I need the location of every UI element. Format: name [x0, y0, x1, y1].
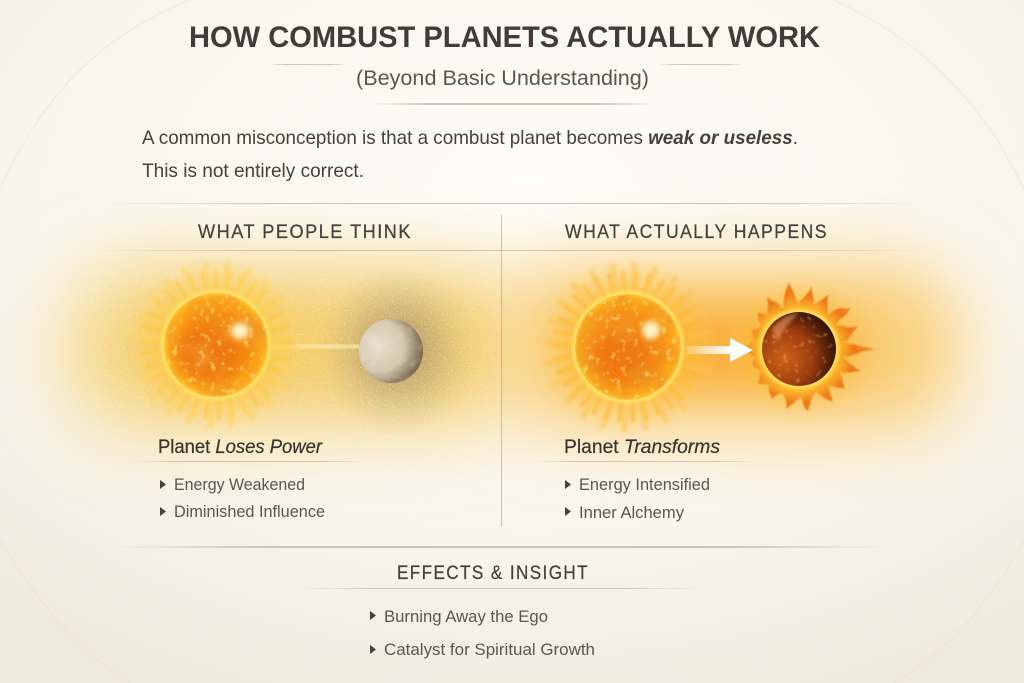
panel: what actually happens — [535, 221, 875, 522]
subheading: planet loses power: Planet Loses Power — [158, 436, 323, 458]
icon: weakened planet — [359, 319, 423, 383]
bullet: catalyst for spiritual growth: Catalyst for Spiritual Growth — [384, 640, 595, 659]
icon: sun — [536, 255, 720, 439]
rule — [300, 588, 700, 589]
bullet: diminished influence: Diminished Influence — [174, 502, 325, 521]
icon: transformed planet with flames — [723, 273, 875, 425]
subheading: planet transforms: Planet Transforms — [564, 436, 720, 458]
stardust — [90, 270, 500, 450]
bullet: burning away the ego: Burning Away the Ego — [384, 607, 548, 626]
heading: effects and insight: EFFECTS & INSIGHT — [397, 562, 589, 584]
arrow — [686, 338, 753, 362]
icon: sun — [124, 253, 308, 437]
title rules — [270, 64, 744, 105]
panel dividers — [95, 203, 925, 548]
bullet: energy intensified: Energy Intensified — [579, 475, 710, 494]
rule — [535, 461, 757, 462]
bullet: inner alchemy: Inner Alchemy — [579, 503, 684, 522]
glow band: left panel — [70, 262, 520, 438]
panel: what people think — [124, 221, 423, 521]
bullet: energy weakened: Energy Weakened — [174, 475, 305, 494]
intro text: A common misconception is that a combust planet becomes weak or useless. — [142, 127, 798, 149]
intro text: This is not entirely correct. — [142, 160, 364, 182]
intro text — [142, 127, 798, 182]
title: HOW COMBUST PLANETS ACTUALLY WORK — [189, 21, 820, 54]
rule — [135, 461, 365, 462]
subtitle: (Beyond Basic Understanding) — [356, 67, 649, 90]
panel: effects and insight — [300, 562, 700, 659]
heading: what people think: WHAT PEOPLE THINK — [198, 221, 412, 243]
icon: beam from sun to planet — [268, 345, 360, 348]
glow band: right panel — [500, 265, 960, 430]
heading: what actually happens: WHAT ACTUALLY HAPPENS — [565, 221, 828, 243]
